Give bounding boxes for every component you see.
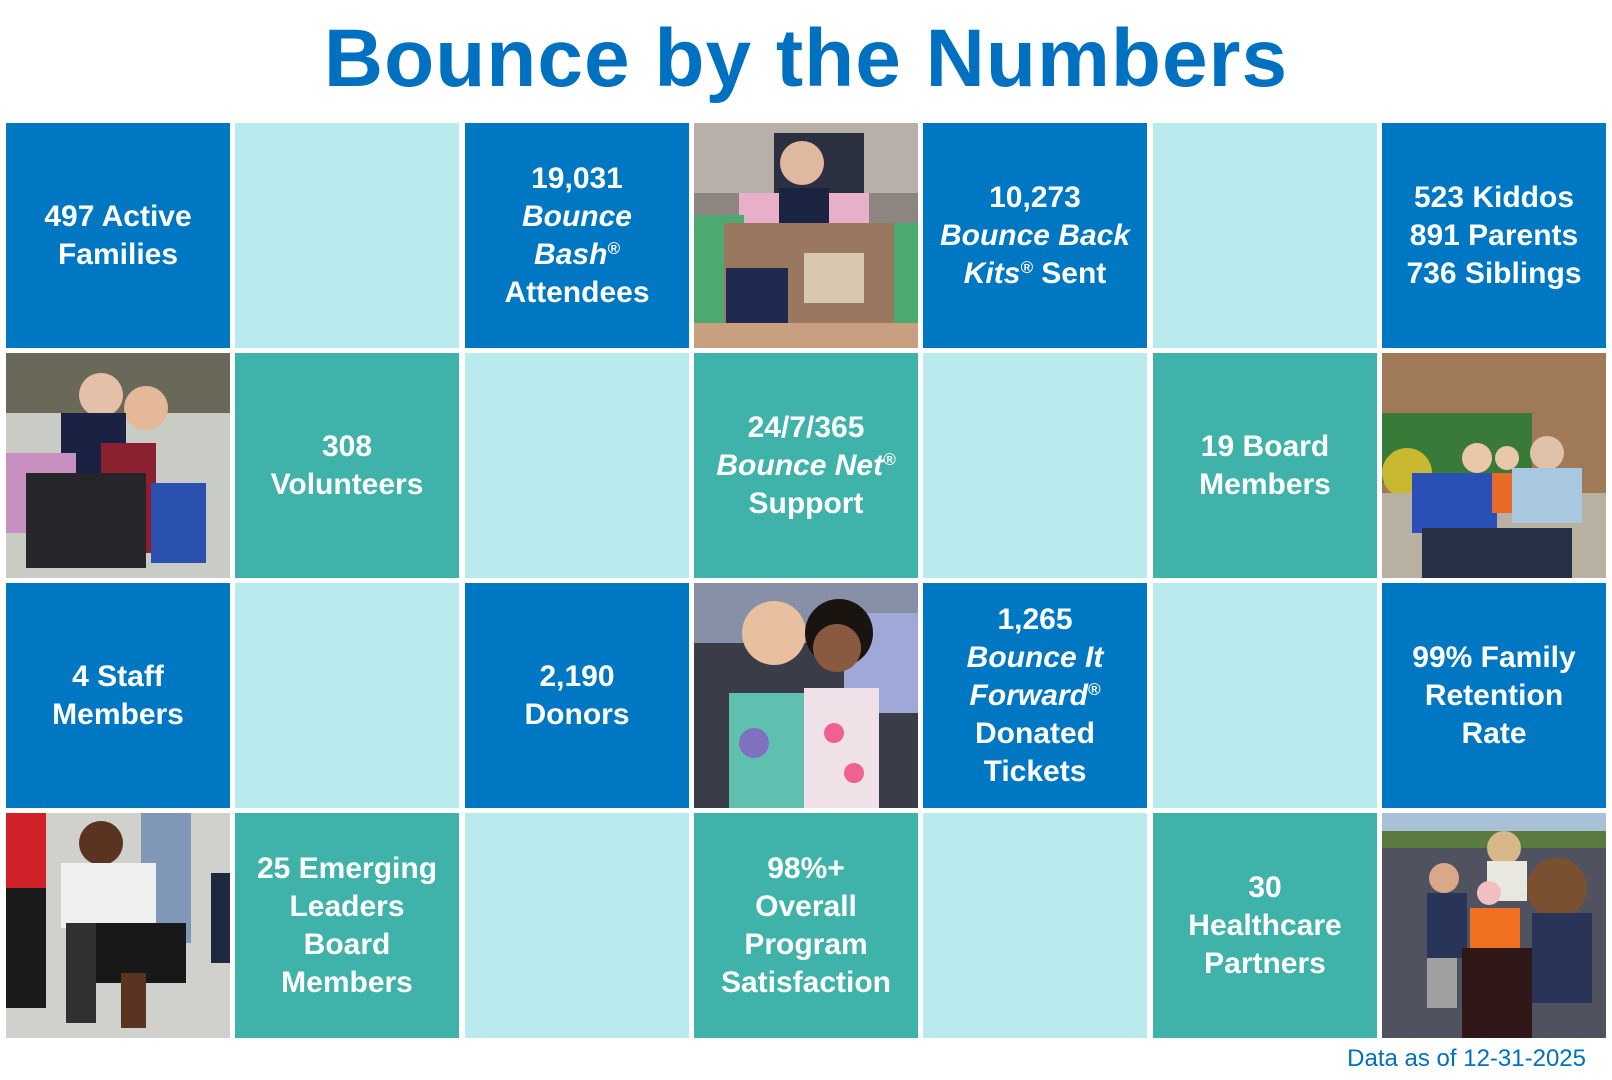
title: Bounce by the Numbers: [324, 13, 1288, 104]
tile: bounce back kits: 10,273: [989, 180, 1081, 214]
tile: emerging leaders: [235, 813, 459, 1038]
tile: emerging leaders: Members: [281, 966, 413, 998]
tile: program satisfaction: Program: [744, 928, 868, 960]
tile: bounce back kits: [923, 123, 1147, 348]
tile: light blank: [1153, 123, 1377, 348]
tile: healthcare partners: [1153, 813, 1377, 1038]
tile: board members: Members: [1199, 468, 1331, 500]
tile: bounce bash attendees: 19,031: [531, 162, 623, 194]
tile: bounce it forward tickets: [923, 583, 1147, 808]
tile: kiddos parents siblings: 736 Siblings: [1406, 256, 1582, 290]
tile: staff members: 4 Staff: [72, 660, 164, 692]
tile: bounce net support: Support: [748, 486, 863, 520]
tile: retention rate: [1382, 583, 1606, 808]
photo: two girls: [694, 583, 918, 808]
tile: program satisfaction: Overall: [755, 890, 857, 922]
tile: volunteers: 308: [322, 430, 372, 462]
tile: program satisfaction: 98%+: [767, 852, 845, 884]
tile: donors: [465, 583, 689, 808]
tile: bounce back kits: Bounce Back: [940, 218, 1130, 252]
tile: board members: 19 Board: [1201, 430, 1329, 462]
tile: bounce bash attendees: Bounce: [522, 200, 632, 232]
tile: light blank: [465, 813, 689, 1038]
tile: healthcare partners: Healthcare: [1188, 908, 1342, 942]
tile: bounce net support: 24/7/365: [748, 410, 864, 444]
tile: light blank: [923, 813, 1147, 1038]
tile: active families: Families: [58, 238, 178, 270]
photo: man in wheelchair: [6, 813, 230, 1038]
photo: kids by tractor: [1382, 353, 1606, 578]
tile: kiddos parents siblings: 891 Parents: [1410, 218, 1578, 252]
tile: donors: Donors: [524, 698, 630, 730]
tile: staff members: Members: [52, 698, 184, 730]
tile: light blank: [465, 353, 689, 578]
tile: bounce it forward tickets: Bounce It: [967, 640, 1103, 674]
photo: family with mascot: [1382, 813, 1606, 1038]
tile: healthcare partners: 30: [1248, 870, 1282, 904]
tile: staff members: [6, 583, 230, 808]
tile: light blank: [923, 353, 1147, 578]
tile: bounce it forward tickets: Forward®: [970, 678, 1100, 712]
tile: board members: [1153, 353, 1377, 578]
tile: retention rate: Retention: [1425, 678, 1563, 712]
tile: active families: 497 Active: [44, 200, 192, 232]
tile: retention rate: 99% Family: [1412, 640, 1576, 674]
tile: light blank: [235, 123, 459, 348]
tile: emerging leaders: 25 Emerging: [257, 852, 437, 884]
tile: emerging leaders: Board: [304, 928, 390, 960]
tile: program satisfaction: [694, 813, 918, 1038]
tile: retention rate: Rate: [1461, 716, 1527, 750]
photo: girl with kit box: [694, 123, 918, 348]
tile: kiddos parents siblings: [1382, 123, 1606, 348]
tile: program satisfaction: Satisfaction: [721, 966, 891, 998]
tile: active families: [6, 123, 230, 348]
tile: emerging leaders: Leaders: [289, 890, 405, 922]
date note: Data as of 12-31-2025: [1347, 1045, 1586, 1072]
tile: bounce bash attendees: Bash®: [534, 238, 620, 270]
tile: bounce bash attendees: Attendees: [504, 276, 650, 308]
tile: volunteers: Volunteers: [271, 468, 423, 500]
tile: bounce net support: [694, 353, 918, 578]
tile: kiddos parents siblings: 523 Kiddos: [1414, 180, 1574, 214]
tile: healthcare partners: Partners: [1204, 946, 1326, 980]
photo: two kids with wheelchair: [6, 353, 230, 578]
tile: bounce net support: Bounce Net®: [716, 448, 896, 482]
tile: bounce it forward tickets: Donated: [975, 716, 1095, 750]
tile: bounce it forward tickets: 1,265: [997, 602, 1073, 636]
tile: bounce back kits: Kits® Sent: [964, 256, 1106, 290]
tile: light blank: [1153, 583, 1377, 808]
tile: bounce bash attendees: [465, 123, 689, 348]
tile: light blank: [235, 583, 459, 808]
tile: donors: 2,190: [539, 660, 615, 692]
tile: bounce it forward tickets: Tickets: [984, 754, 1086, 788]
tile: volunteers: [235, 353, 459, 578]
